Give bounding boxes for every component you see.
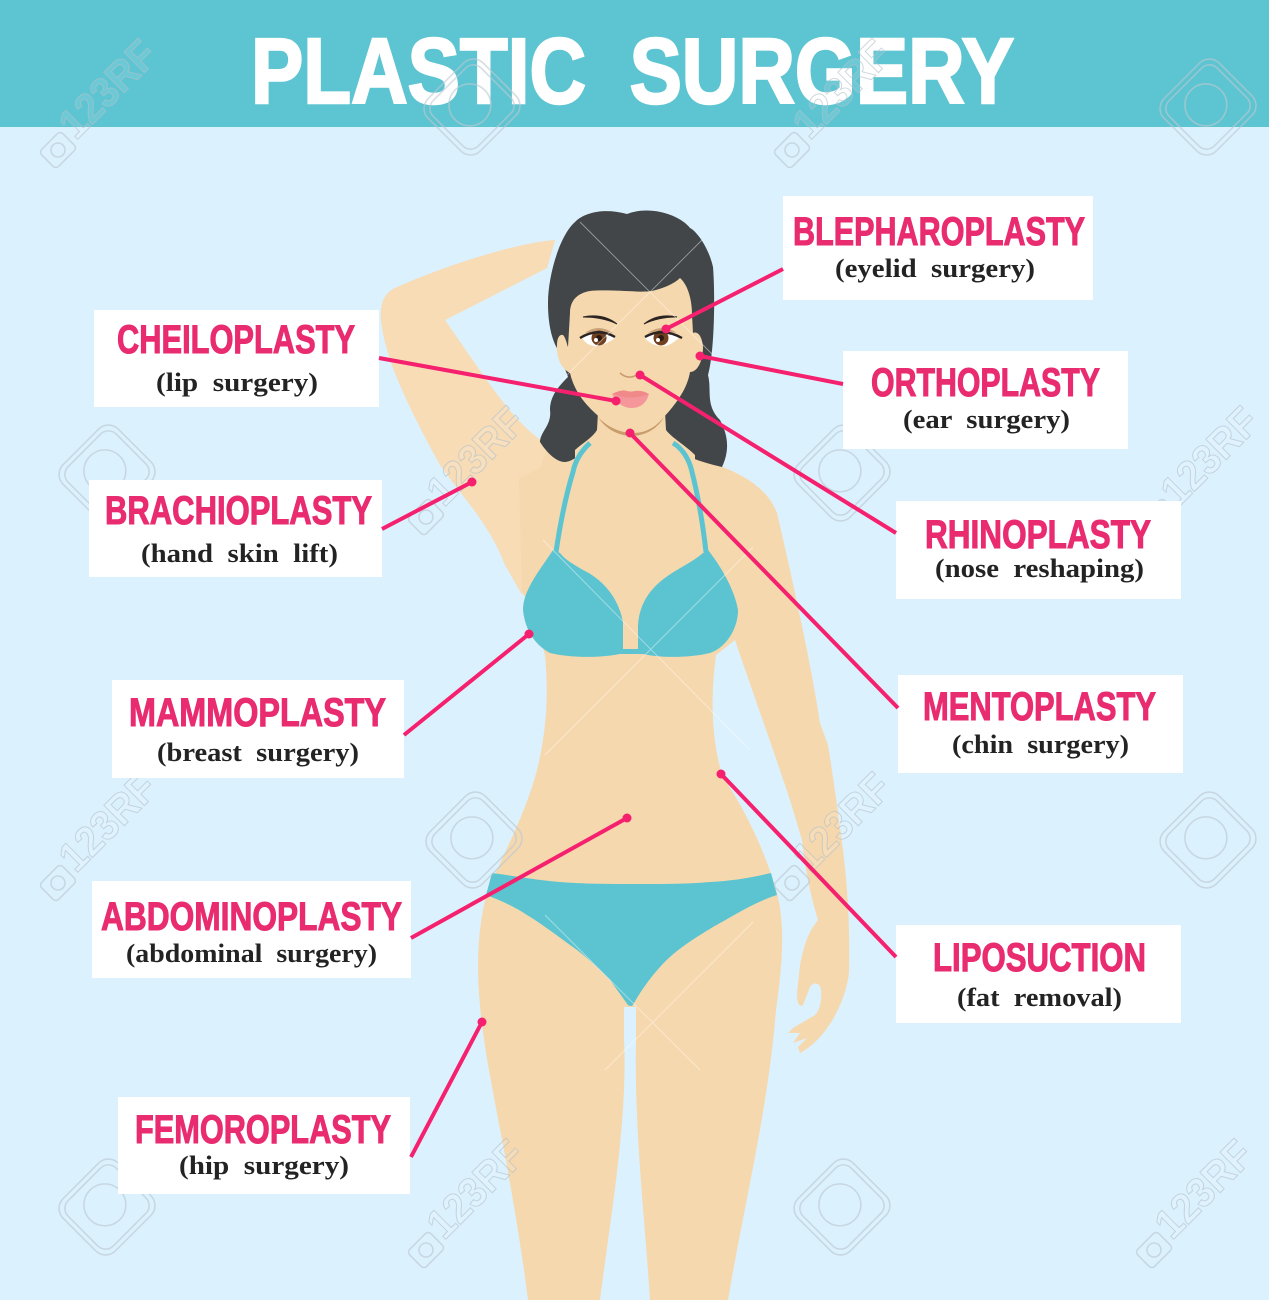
title: PLASTIC SURGERY [251,19,1014,123]
bikini top [523,550,738,657]
label: mammoplasty: (breast surgery) [157,738,359,767]
label: mentoplasty: (chin surgery) [952,730,1129,759]
label: orthoplasty [843,351,1128,449]
pointer: ear [696,352,843,384]
watermarks: 123RF [49,31,166,147]
watermarks: 123RF [417,398,534,514]
label: cheiloplasty [94,310,379,407]
pointer: breast [404,630,534,735]
label: mentoplasty [898,675,1183,773]
label: abdominoplasty: (abdominal surgery) [126,939,377,968]
watermarks: 123RF [417,1131,534,1247]
header banner [0,0,1269,127]
eyebrows [583,316,677,324]
label: cheiloplasty: (lip surgery) [156,368,318,397]
label: cheiloplasty: CHEILOPLASTY [117,318,355,362]
label: mammoplasty: MAMMOPLASTY [129,691,386,735]
label: abdominoplasty: ABDOMINOPLASTY [101,895,402,939]
label: rhinoplasty: RHINOPLASTY [925,513,1151,557]
watermarks: 123RF [1145,1131,1262,1247]
hair [540,211,727,467]
label: abdominoplasty [92,881,411,978]
label: rhinoplasty [896,501,1181,599]
eye: right [645,328,682,346]
label: mentoplasty: MENTOPLASTY [923,685,1156,729]
face [557,278,703,432]
lips [612,390,649,408]
neck [575,412,695,490]
underarm shade [381,240,555,595]
watermarks: 123RF [783,764,900,880]
illustration: woman in bikini [381,211,849,1300]
bikini straps [556,443,706,552]
label: liposuction [896,925,1181,1023]
pointer: eyelid [662,269,783,334]
pointer: fat [716,770,896,957]
label: brachioplasty [89,480,382,577]
body [381,240,849,1300]
label: blepharoplasty: BLEPHAROPLASTY [793,210,1085,254]
label: femoroplasty: (hip surgery) [179,1151,349,1180]
chin shadow [598,417,664,436]
pointer lines [379,269,898,1157]
watermarks: 123RF [783,31,900,147]
pointer: nose [636,370,896,533]
bikini bottom [486,873,777,1006]
pointer: arm [382,478,476,529]
label: blepharoplasty [783,196,1093,300]
nose [620,373,637,377]
label: liposuction: (fat removal) [957,983,1122,1012]
label: orthoplasty: ORTHOPLASTY [871,361,1100,405]
label: blepharoplasty: (eyelid surgery) [835,254,1035,283]
label: liposuction: LIPOSUCTION [933,936,1146,980]
label: orthoplasty: (ear surgery) [903,405,1070,434]
pointer: chin [626,428,898,708]
pointer: lip [379,358,620,406]
label: mammoplasty [112,680,404,778]
label: brachioplasty: (hand skin lift) [141,539,338,568]
label: rhinoplasty: (nose reshaping) [935,554,1144,583]
label: femoroplasty: FEMOROPLASTY [135,1108,391,1152]
eye: left [580,328,615,346]
label: femoroplasty [118,1097,410,1194]
watermarks: 123RF [49,764,166,880]
pointer: abdomen [411,814,632,938]
label: brachioplasty: BRACHIOPLASTY [105,489,372,533]
pointer: hip [411,1018,486,1157]
